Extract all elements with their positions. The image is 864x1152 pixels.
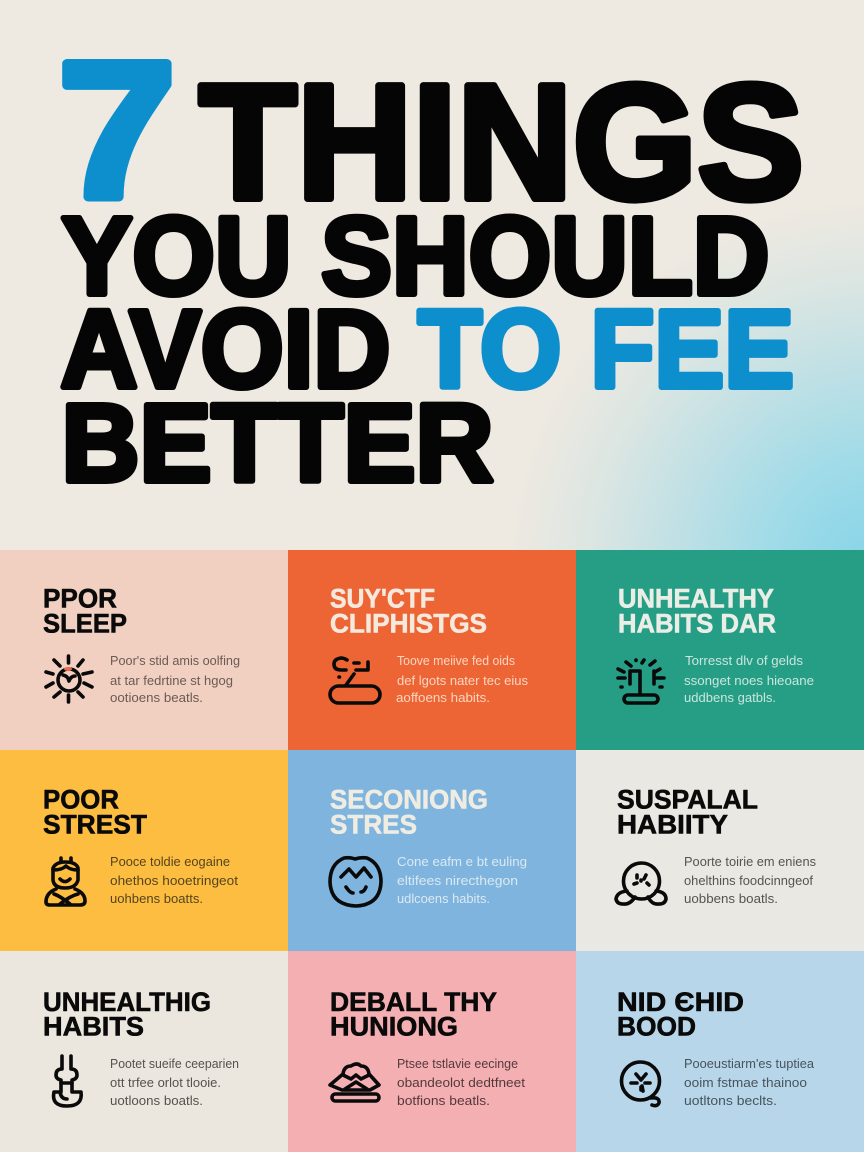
description: Poor's stid amis oolfing: [110, 653, 240, 668]
description: eltifees nirecthegon: [397, 873, 518, 888]
description: uotltons beclts.: [684, 1093, 777, 1108]
heading: UNHEALTHIG: [43, 987, 211, 1017]
panel: unhealthig habits: [0, 951, 288, 1152]
heading: PPOR: [43, 584, 117, 614]
description: Ptsee tstlavie eecinge: [397, 1056, 518, 1071]
description: Cone eafm e bt euling: [397, 854, 527, 869]
description: Poorte toirie em eniens: [684, 854, 816, 869]
description: uddbens gatbls.: [684, 690, 776, 705]
panel: deball thy huniong: [288, 951, 576, 1152]
description: aoffoens habits.: [396, 690, 490, 705]
description: uotloons boatls.: [110, 1093, 203, 1108]
description: Torresst dlv of gelds: [685, 653, 804, 668]
description: ohethos hooetringeot: [110, 873, 238, 888]
heading: HABITS: [43, 1012, 144, 1042]
description: Toove meiive fed oids: [397, 653, 515, 668]
description: at tar fedrtine st hgog: [110, 673, 233, 688]
description: uobbens boatls.: [684, 891, 778, 906]
heading: STREST: [43, 810, 147, 840]
title number 7: 7: [58, 22, 176, 239]
heading: SUSPALAL: [617, 784, 758, 814]
description: obandeolot dedtfneet: [397, 1075, 525, 1090]
title line: AVOID: AVOID: [60, 288, 390, 411]
icon: lamp with rays: [618, 660, 664, 703]
icon: smiling face: [330, 858, 381, 906]
heading: NID ЄHID: [617, 987, 744, 1017]
heading: STRES: [330, 810, 417, 840]
heading: SECONIONG: [330, 784, 488, 814]
panel: ppor sleep: [0, 550, 288, 750]
heading: SLEEP: [43, 608, 127, 638]
description: Pooce toldie eogaine: [110, 854, 230, 869]
icon: magnifier circle: [622, 1062, 660, 1106]
description: ohelthins foodcinngeof: [684, 873, 813, 888]
panel: suy'ctf cliphistgs: [288, 550, 576, 750]
title line: THINGS: THINGS: [199, 50, 804, 234]
description: botfions beatls.: [397, 1093, 490, 1108]
header background: [0, 0, 864, 550]
icon: round creature: [616, 863, 666, 904]
heading: CLIPHISTGS: [330, 608, 487, 638]
panel: suspalal habiity: [576, 750, 864, 951]
icon: cloud layers: [330, 1064, 379, 1101]
description: Pooeustiarm'es tuptiea: [684, 1056, 815, 1071]
description: ootioens beatls.: [110, 690, 203, 705]
description: ott trfee orlot tlooie.: [110, 1075, 221, 1090]
heading: SUY'CTF: [330, 584, 435, 614]
heading: HABITS DAR: [618, 608, 776, 638]
icon: plug: [54, 1056, 81, 1106]
title line: BETTER: BETTER: [62, 382, 494, 505]
heading: HUNIONG: [330, 1012, 458, 1042]
panel: seconiong stres: [288, 750, 576, 951]
icon: meditating person: [46, 858, 85, 905]
panel: unhealthy habits dar: [576, 550, 864, 750]
icon: pill and hook: [330, 658, 380, 703]
description: uohbens boatts.: [110, 891, 203, 906]
description: ooim fstmae thainoo: [684, 1075, 807, 1090]
heading: UNHEALTHY: [618, 584, 774, 614]
heading: HABIITY: [617, 810, 728, 840]
heading: DEBALL THY: [330, 987, 497, 1017]
title line: YOU SHOULD: YOU SHOULD: [62, 195, 770, 318]
description: Pootet sueife ceeparien: [110, 1056, 239, 1071]
panel: nid ehid bood: [576, 951, 864, 1152]
heading: BOOD: [617, 1012, 696, 1042]
title: [58, 22, 804, 505]
title line: TO FEE: TO FEE: [418, 288, 794, 411]
heading: POOR: [43, 784, 119, 814]
icon: sun: [46, 656, 92, 702]
description: def lgots nater tec eius: [397, 673, 528, 688]
description: udlcoens habits.: [397, 891, 490, 906]
panel: poor strest: [0, 750, 288, 951]
description: ssonget noes hieoane: [684, 673, 814, 688]
